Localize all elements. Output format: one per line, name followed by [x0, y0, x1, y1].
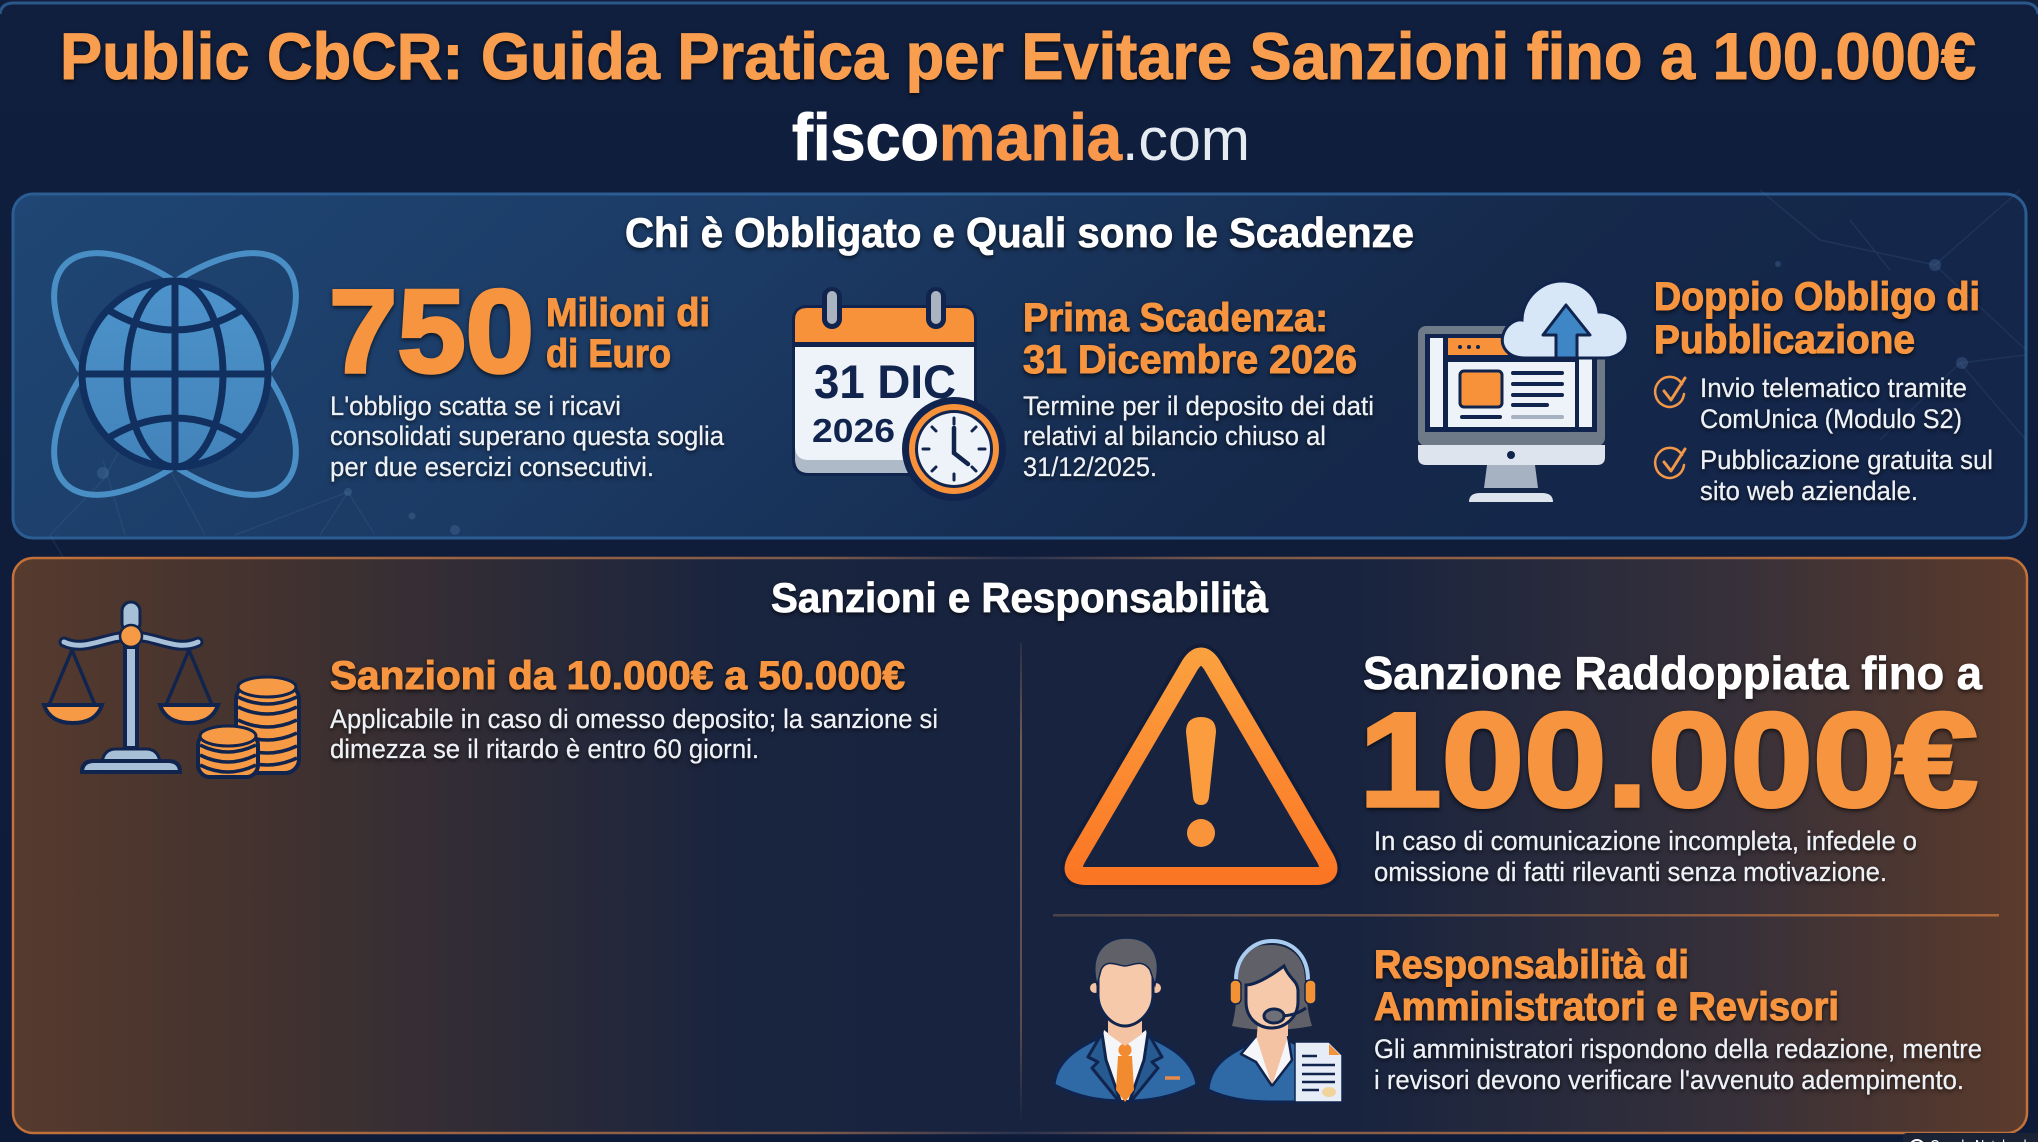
text: prima scadenza: 31 Dicembre 2026 — [1023, 338, 1357, 382]
text: soglia ricavi: per due esercizi consecutivi. — [330, 452, 654, 482]
panel: sanzioni e responsabilità — [13, 558, 2027, 1133]
text: sanzioni da 10.000 a 50.000 — [330, 654, 938, 764]
text: prima scadenza: relativi al bilancio chiuso al — [1023, 421, 1326, 451]
list: obblighi: ComUnica (Modulo S2) — [1700, 404, 1962, 434]
callout: sanzione raddoppiata: 100.000€ — [1359, 686, 1978, 835]
text: sanzioni da 10.000 a 50.000: Sanzioni da 10.000€ a 50.000€ — [330, 654, 905, 698]
callout: sanzione raddoppiata: Sanzione Raddoppiata fino a — [1363, 647, 1982, 699]
heading: chi è obbligato: Chi è Obbligato e Quali sono le Scadenze — [625, 209, 1414, 256]
icon: document — [1295, 1042, 1342, 1102]
text: responsabilità: Amministratori e Revisori — [1374, 985, 1839, 1029]
text: sanzioni da 10.000 a 50.000: Applicabile in caso di omesso deposito; la sanzione si — [330, 704, 938, 734]
list: obblighi: Pubblicazione gratuita sul — [1700, 445, 1993, 475]
list: obblighi: sito web aziendale. — [1700, 476, 1918, 506]
icon: check two — [1655, 448, 1685, 478]
heading: sanzioni: Sanzioni e Responsabilità — [771, 574, 1269, 621]
icon: monitor with cloud upload — [1418, 281, 1628, 502]
text: prima scadenza — [1023, 296, 1374, 482]
icon: calendar with clock — [792, 287, 1006, 501]
callout: sanzione raddoppiata: omissione di fatti rilevanti senza motivazione. — [1374, 857, 1887, 887]
icon: globe — [51, 250, 299, 498]
text: prima scadenza: 31/12/2025. — [1023, 452, 1157, 482]
text: responsabilità — [1374, 943, 1982, 1095]
icon: calendar with clock: 31 DIC — [814, 355, 956, 408]
stat: 750 milioni di euro: 750 — [329, 266, 534, 398]
stat: 750 milioni di euro — [329, 266, 710, 398]
logo: fiscomania.com — [792, 100, 1250, 174]
text: soglia ricavi — [330, 391, 725, 482]
text: sanzioni da 10.000 a 50.000: dimezza se il ritardo è entro 60 giorni. — [330, 734, 759, 764]
stat: 750 milioni di euro: Milioni di — [546, 291, 710, 335]
list: obblighi: Invio telematico tramite — [1700, 373, 1967, 403]
badge: watermark — [1903, 1133, 2038, 1142]
text: soglia ricavi: consolidati superano questa soglia — [330, 421, 725, 451]
logo: fiscomania.com: fisco — [792, 100, 939, 174]
logo: fiscomania.com: .com — [1122, 106, 1250, 173]
text: responsabilità: Gli amministratori rispondono della redazione, mentre — [1374, 1034, 1982, 1064]
title: Public CbCR: Guida Pratica per Evitare Sanzioni fino a 100.000€ — [60, 19, 1976, 93]
text: prima scadenza: Prima Scadenza: — [1023, 296, 1328, 340]
callout: sanzione raddoppiata: In caso di comunicazione incompleta, infedele o — [1374, 826, 1917, 856]
panel: chi è obbligato e scadenze — [13, 190, 2026, 625]
text: soglia ricavi: L'obbligo scatta se i ricavi — [330, 391, 621, 421]
icon: auditor — [1208, 941, 1342, 1102]
icon: scales and coins — [44, 602, 299, 777]
callout: sanzione raddoppiata — [1359, 647, 1982, 887]
logo: fiscomania.com: mania — [939, 100, 1123, 174]
icon: calendar with clock: 2026 — [812, 412, 895, 449]
stat: 750 milioni di euro: di Euro — [546, 332, 671, 376]
icon: administrator — [1054, 938, 1197, 1102]
text: doppio obbligo: Pubblicazione — [1654, 318, 1915, 362]
text: responsabilità: i revisori devono verificare l'avvenuto adempimento. — [1374, 1065, 1964, 1095]
text: prima scadenza: Termine per il deposito dei dati — [1023, 391, 1374, 421]
icon: warning triangle — [1074, 656, 1328, 876]
text: doppio obbligo: Doppio Obbligo di — [1654, 275, 1980, 319]
icon: check one — [1655, 377, 1685, 407]
icon: administrator and auditor — [1054, 938, 1342, 1102]
list: obblighi — [1655, 373, 1993, 506]
text: responsabilità: Responsabilità di — [1374, 943, 1689, 987]
text: doppio obbligo — [1654, 275, 1980, 362]
